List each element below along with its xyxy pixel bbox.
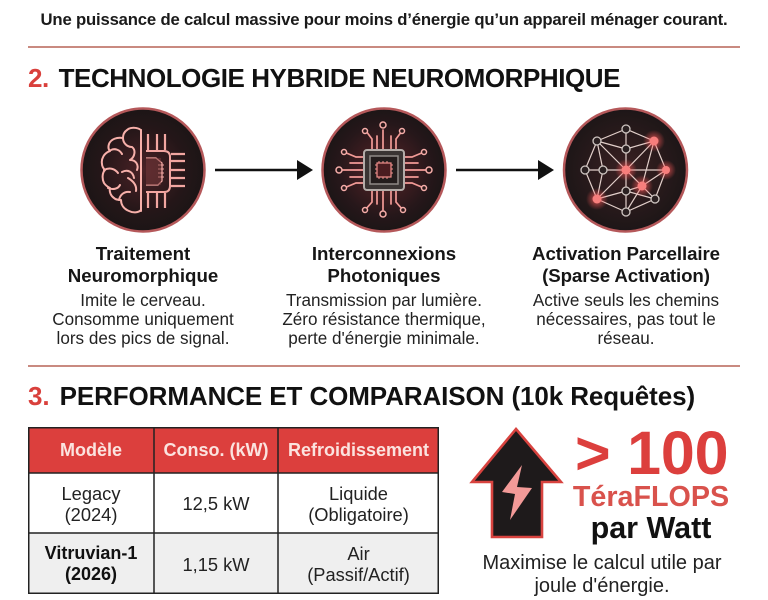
heading: section 2: 2. TECHNOLOGIE HYBRIDE NEUROMORPHIQUE <box>28 63 620 93</box>
subheading: neuromorphic processing: Traitement <box>96 243 190 264</box>
icon: sparse neural network <box>562 107 688 233</box>
arrow: step two to three <box>456 160 554 180</box>
stat caption: Maximise le calcul utile par <box>483 552 721 574</box>
stat caption <box>483 552 722 596</box>
comparison table: Modèle <box>60 440 122 460</box>
comparison table: (2024) <box>65 504 117 524</box>
stat caption: joule d'énergie. <box>534 574 670 596</box>
text: photonic interconnects: Transmission par lumière. <box>286 291 482 310</box>
icon: photonic chip <box>321 107 447 233</box>
stat: more than 100: > 100 <box>575 419 728 487</box>
subheading: photonic interconnects <box>312 243 456 286</box>
comparison table: Liquide <box>329 482 388 504</box>
text: sparse activation: réseau. <box>597 329 654 348</box>
text: neuromorphic processing: Consomme uniquement <box>52 310 234 329</box>
subheading: neuromorphic processing <box>68 243 218 286</box>
comparison table: Refroidissement <box>288 440 429 460</box>
subheading: sparse activation: (Sparse Activation) <box>542 265 710 286</box>
comparison table: (Obligatoire) <box>308 504 409 524</box>
comparison table: Conso. (kW) <box>164 440 268 460</box>
text: neuromorphic processing <box>52 291 234 348</box>
comparison table <box>28 427 439 594</box>
subheading: photonic interconnects: Photoniques <box>327 265 441 286</box>
icon: up arrow with lightning bolt <box>469 427 564 538</box>
text: sparse activation: nécessaires, pas tout le <box>536 310 716 329</box>
text: neuromorphic processing: lors des pics de signal. <box>57 329 229 348</box>
text: photonic interconnects: perte d'énergie minimale. <box>288 329 480 348</box>
stat unit: per watt: par Watt <box>591 511 711 545</box>
heading: section 3: 3. PERFORMANCE ET COMPARAISON (10k Requêtes) <box>28 381 695 411</box>
text: neuromorphic processing: Imite le cerveau. <box>80 291 206 310</box>
text: sparse activation <box>532 291 719 348</box>
text: sparse activation: Active seuls les chemins <box>533 291 719 310</box>
subheading: neuromorphic processing: Neuromorphique <box>68 265 218 286</box>
comparison table: 1,15 kW <box>182 554 250 574</box>
comparison table: (2026) <box>65 564 117 584</box>
comparison table: 12,5 kW <box>182 493 250 514</box>
stat unit: teraflops: TéraFLOPS <box>573 481 729 513</box>
arrow: step one to two <box>215 160 313 180</box>
comparison table: Legacy <box>62 482 120 504</box>
subheading: sparse activation <box>532 243 720 286</box>
comparison table: Vitruvian-1 <box>45 543 137 563</box>
icon: brain and chip <box>80 107 206 233</box>
comparison table: (Passif/Actif) <box>307 564 410 585</box>
text: photonic interconnects: Zéro résistance thermique, <box>282 310 486 329</box>
intro sentence: Une puissance de calcul massive pour moins d’énergie qu’un appareil ménager courant. <box>41 10 727 29</box>
subheading: photonic interconnects: Interconnexions <box>312 243 456 264</box>
comparison table: Air <box>347 543 370 564</box>
text: photonic interconnects <box>282 291 486 348</box>
subheading: sparse activation: Activation Parcellaire <box>532 243 720 264</box>
